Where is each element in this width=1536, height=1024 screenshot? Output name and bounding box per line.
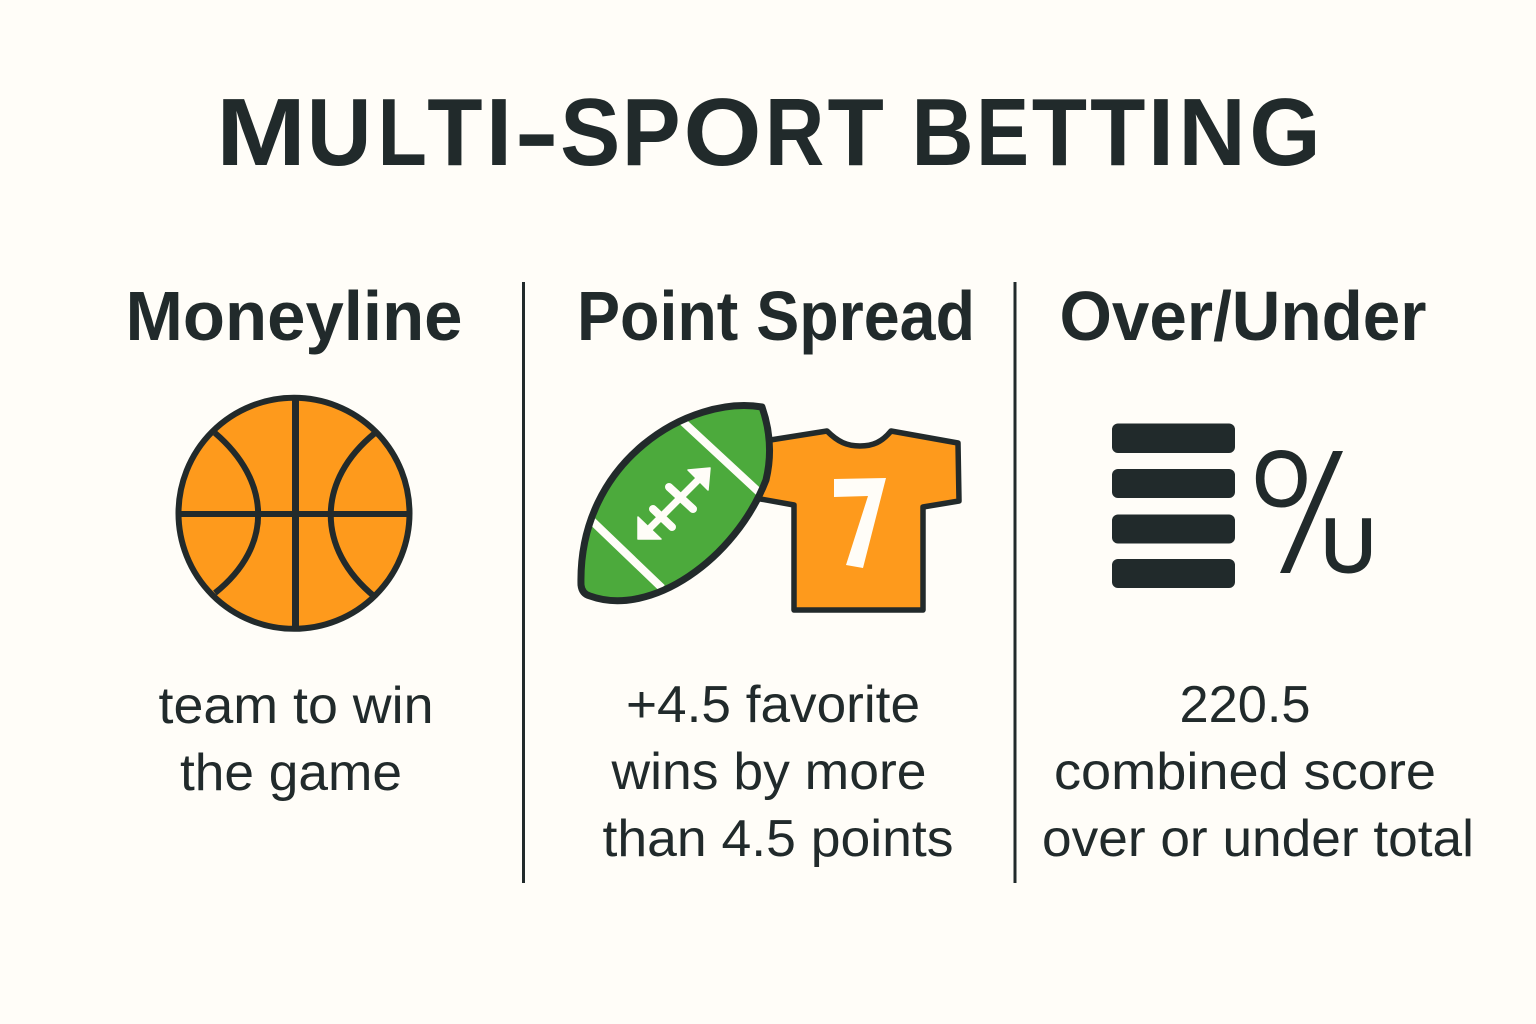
description: moneyline: the game [180, 744, 402, 802]
icon: stacked lines [1112, 424, 1235, 588]
heading: point spread: Point Spread [577, 277, 975, 355]
panel: point spread [577, 277, 975, 868]
description: over/under: over or under total [1042, 810, 1474, 868]
title: T [1032, 79, 1087, 186]
title: U [307, 79, 372, 186]
panel: over/under [1042, 277, 1474, 868]
title: L [378, 79, 427, 186]
heading: moneyline: Moneyline [126, 277, 462, 355]
title: T [828, 79, 884, 186]
title: I [1148, 79, 1174, 186]
icon: O/U symbol [1253, 435, 1376, 589]
title: E [976, 79, 1029, 186]
panel: moneyline [126, 277, 462, 802]
title: I [486, 79, 512, 186]
icon: O/U symbol: O [1253, 435, 1309, 522]
description: moneyline: team to win [158, 677, 434, 735]
title: B [911, 79, 974, 186]
description: over/under: 220.5 [1180, 676, 1310, 734]
description: point spread: than 4.5 points [602, 810, 954, 868]
title: N [1178, 79, 1246, 186]
description: point spread: wins by more [610, 743, 926, 801]
title: - [514, 79, 559, 186]
title: T [427, 79, 483, 186]
icon: football [581, 406, 769, 601]
description: point spread: +4.5 favorite [626, 676, 920, 734]
title: G [1249, 79, 1321, 186]
title: P [622, 79, 681, 186]
description: over/under [1042, 676, 1474, 868]
title: T [1090, 79, 1145, 186]
icon: basketball [178, 397, 410, 630]
heading: over/under: Over/Under [1060, 277, 1426, 355]
title: M [216, 79, 306, 186]
icon: O/U symbol: U [1321, 504, 1376, 589]
description: over/under: combined score [1054, 743, 1436, 801]
title: O [683, 79, 761, 186]
description: point spread [602, 676, 954, 868]
icon: jersey [755, 431, 959, 610]
description: moneyline [158, 677, 434, 802]
jersey number [834, 478, 886, 568]
title: R [765, 79, 824, 186]
title: S [560, 79, 620, 186]
